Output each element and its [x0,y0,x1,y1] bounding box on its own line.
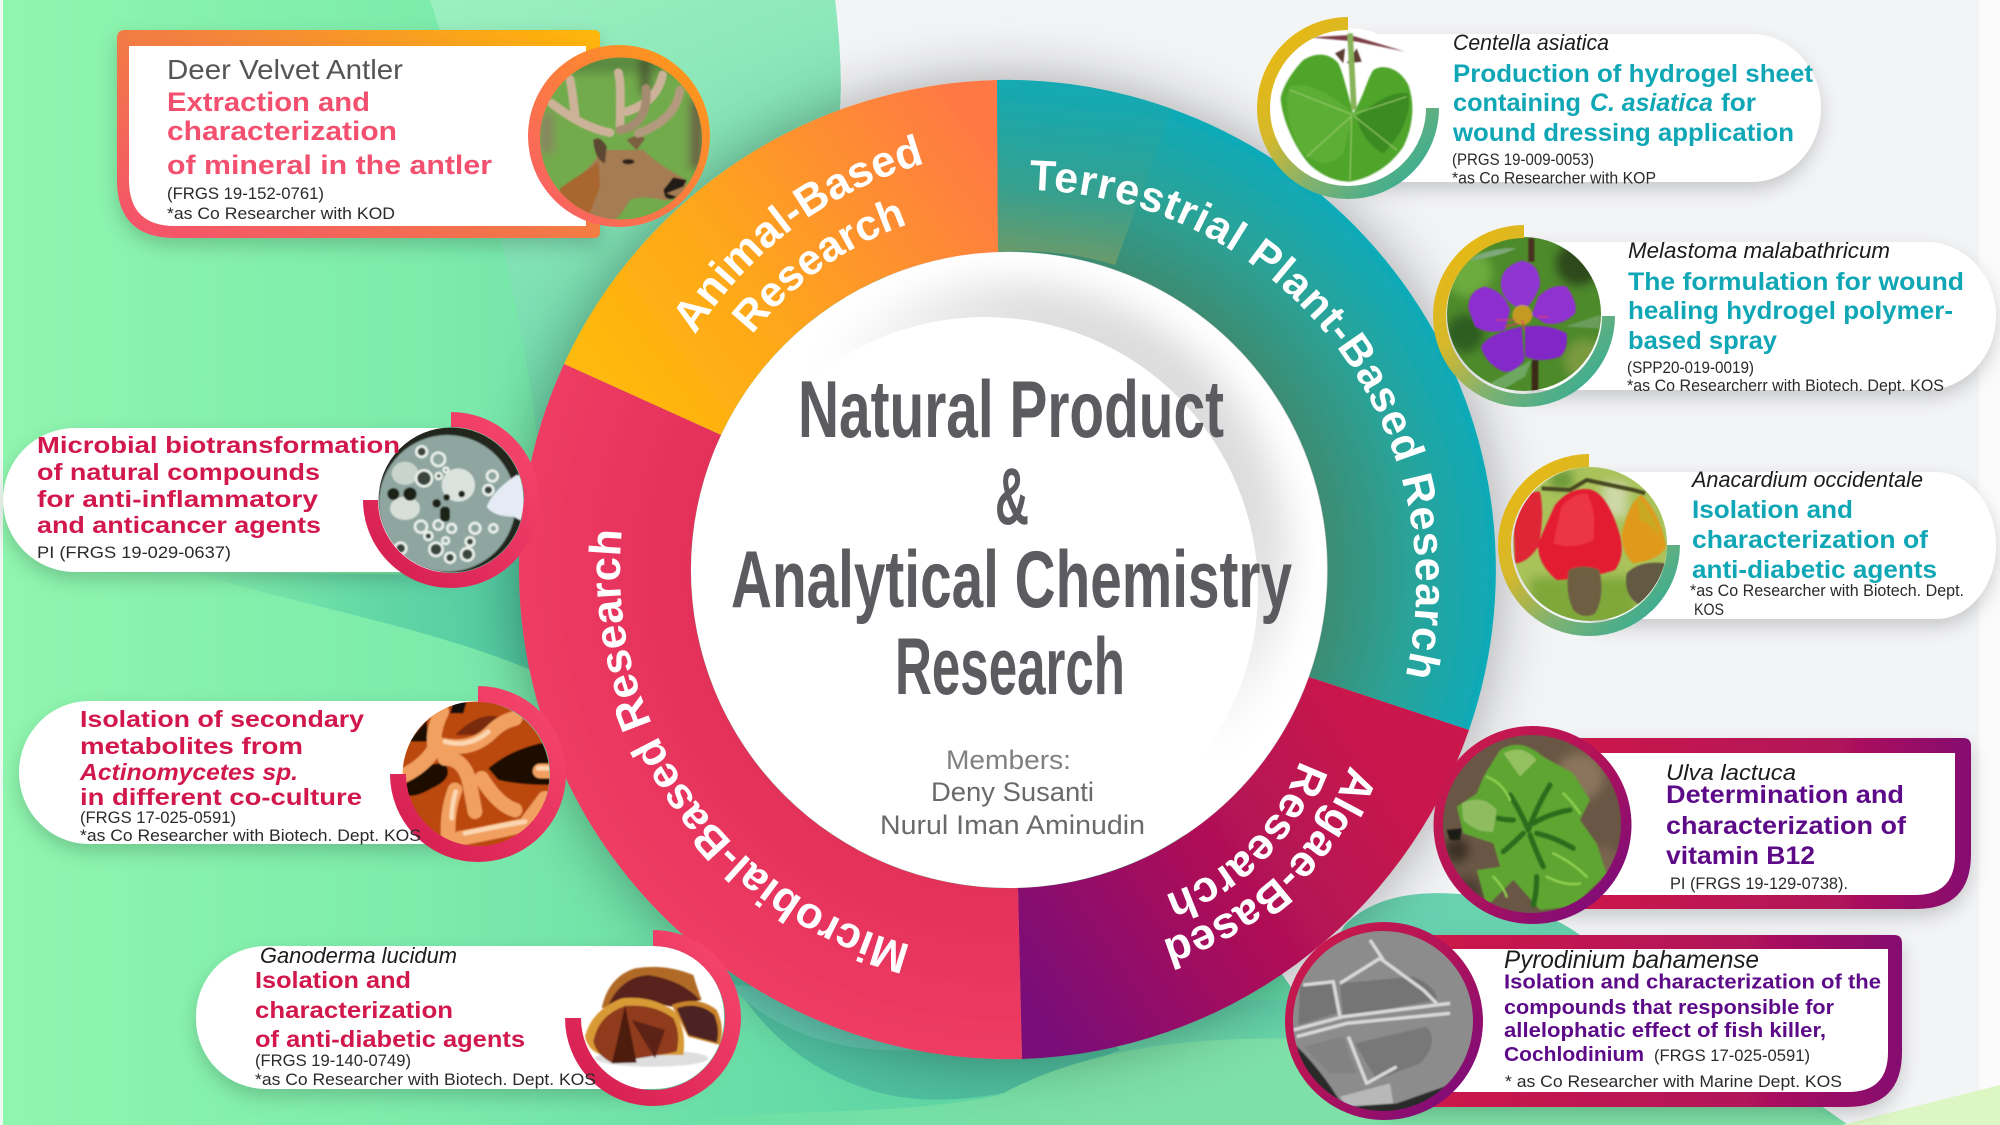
panel text: actinomycetes: (FRGS 17-025-0591) [80,808,236,827]
accent arc [370,420,532,580]
accent arc [1504,460,1674,630]
panel text: anacardium occidentale: Isolation and [1692,496,1853,524]
panel text: anacardium occidentale: Anacardium occidentale [1690,467,1923,492]
panel text: ganoderma lucidum: Isolation and [255,967,411,993]
panel text: centella asiatica [1452,30,1814,188]
panel: ganoderma lucidum [196,938,733,1098]
members: Deny Susanti [931,777,1094,807]
accent arc [573,938,733,1098]
segment: animal-based [564,80,998,435]
panel text: actinomycetes: Isolation of secondary [80,706,364,732]
panel text: centella asiatica: containing [1453,89,1581,117]
panel text: ulva lactuca: PI (FRGS 19-129-0738). [1670,874,1848,893]
panel text: microbial biotransformation: and anticancer agents [37,512,321,538]
panel text: pyrodinium bahamense: Isolation and characterization of the [1504,970,1881,994]
label: animal-based research: Research [731,201,906,333]
panel text: microbial biotransformation: for anti-inflammatory [37,486,318,512]
title: Natural Product [798,365,1224,455]
panel text: microbial biotransformation: Microbial biotransformation [37,432,400,458]
panel text: actinomycetes [79,706,421,845]
photo: centella leaf [1281,33,1412,182]
panel text: ganoderma lucidum: characterization [255,997,453,1023]
panel text: microbial biotransformation: PI (FRGS 19-029-0637) [37,543,231,562]
photo: ganoderma mushrooms [585,967,722,1067]
panel text: ganoderma lucidum: of anti-diabetic agents [255,1026,525,1052]
panel text: actinomycetes: metabolites from [80,733,303,759]
panel text: pyrodinium bahamense: * as Co Researcher with Marine Dept. KOS [1505,1072,1842,1091]
photo: petri dish [378,428,524,572]
panel text: melastoma malabathricum: healing hydrogel polymer- [1628,297,1953,325]
photo: actinomycetes bacteria [402,702,550,846]
photo: cashew fruit [1513,467,1667,621]
photo: purple flower [1447,237,1601,391]
title: & [995,452,1029,542]
panel text: microbial biotransformation: of natural compounds [37,459,320,485]
accent arc [398,694,558,854]
panel text: ulva lactuca: Determination and [1666,781,1904,809]
ring: research segments [486,44,1532,1094]
segment: terrestrial plant-based [997,80,1496,730]
panel text: pyrodinium bahamense: (FRGS 17-025-0591) [1654,1046,1810,1065]
photo: electron micrograph [1285,922,1483,1120]
panel text: deer velvet antler: characterization [167,116,397,146]
panel text: ulva lactuca [1666,760,1907,893]
members: Members: [946,745,1071,775]
panel text: anacardium occidentale: anti-diabetic agents [1692,556,1937,584]
panel text: deer velvet antler: Deer Velvet Antler [167,54,403,85]
panel text: ulva lactuca: characterization of [1666,812,1907,840]
panel text: anacardium occidentale: characterization of [1692,526,1929,554]
panel text: centella asiatica: (PRGS 19-009-0053) [1452,150,1594,169]
panel text: actinomycetes: Actinomycetes sp. [79,759,298,785]
panel text: pyrodinium bahamense: compounds that responsible for [1504,996,1834,1019]
panel text: deer velvet antler [167,54,493,223]
panel text: ganoderma lucidum [255,943,596,1089]
panel text: melastoma malabathricum: Melastoma malabathricum [1628,238,1890,263]
label: animal-based research: Animal-Based [676,134,922,334]
panel: melastoma malabathricum [1425,220,1996,420]
panel text: ulva lactuca: Ulva lactuca [1666,760,1796,785]
panel text: actinomycetes: *as Co Researcher with Biotech. Dept. KOS [80,826,421,845]
panel: deer velvet antler [117,30,720,240]
title [731,365,1292,712]
accent arc [1264,24,1432,193]
panel text: anacardium occidentale: *as Co Researcher with Biotech. Dept. [1690,581,1964,600]
title: Research [895,622,1125,712]
panel text: ulva lactuca: vitamin B12 [1666,842,1815,870]
panel text: centella asiatica: wound dressing application [1452,119,1794,147]
panel text: ganoderma lucidum: *as Co Researcher with Biotech. Dept. KOS [255,1070,596,1089]
panel: ulva lactuca [1430,726,1971,933]
label: terrestrial plant-based research: Terrestrial Plant-Based Research [1030,160,1441,677]
panel: centella asiatica [1264,24,1821,193]
panel: microbial biotransformation [0,412,531,588]
members [880,745,1145,840]
panel text: anacardium occidentale [1690,467,1964,619]
panel text: melastoma malabathricum: The formulation for wound [1628,268,1964,296]
panel: pyrodinium bahamense [1285,922,1902,1120]
panel text: centella asiatica: Centella asiatica [1453,30,1609,55]
panel text: deer velvet antler: (FRGS 19-152-0761) [167,184,324,203]
panel text: ganoderma lucidum: Ganoderma lucidum [260,943,457,968]
panel text: centella asiatica: Production of hydrogel sheet [1453,60,1814,88]
panel text: melastoma malabathricum: *as Co Researcherr with Biotech. Dept. KOS [1627,376,1944,395]
panel text: microbial biotransformation [37,432,400,562]
panel text: centella asiatica: *as Co Researcher with KOP [1452,168,1656,188]
panel text: actinomycetes: in different co-culture [80,784,362,810]
panel text: pyrodinium bahamense: allelophatic effect of fish killer, [1504,1019,1826,1042]
segment overlay: terrestrial left band [997,80,1172,265]
panel text: ganoderma lucidum: (FRGS 19-140-0749) [255,1051,411,1070]
accent arc [1440,232,1608,400]
members: Nurul Iman Aminudin [880,810,1145,840]
title: Analytical Chemistry [731,535,1292,625]
photo: ulva seaweed [1430,726,1637,933]
panel: anacardium occidentale [1490,450,1996,650]
segment: microbial-based [519,364,1022,1059]
panel text: centella asiatica: for [1721,89,1756,117]
panel text: melastoma malabathricum: (SPP20-019-0019) [1627,358,1754,377]
panel text: pyrodinium bahamense [1504,946,1881,1091]
segment: algae-based [1018,677,1469,1059]
centre disc [691,252,1327,888]
panel text: deer velvet antler: of mineral in the antler [167,150,493,180]
panel text: deer velvet antler: *as Co Researcher with KOD [167,204,395,223]
panel text: centella asiatica: C. asiatica [1590,89,1713,117]
label: microbial-based research: Microbial-Based Research [588,532,908,974]
panel text: pyrodinium bahamense: Cochlodinium [1504,1043,1644,1066]
panel text: pyrodinium bahamense: Pyrodinium bahamense [1504,946,1759,974]
panel text: melastoma malabathricum: based spray [1628,327,1777,355]
photo: deer [528,45,710,227]
panel text: anacardium occidentale: KOS [1694,600,1724,619]
panel text: deer velvet antler: Extraction and [167,87,370,117]
panel text: melastoma malabathricum [1627,238,1964,395]
panel: actinomycetes [12,686,566,862]
label: algae-based research: Algae-Based [1164,766,1374,970]
label: algae-based research: Research [1167,762,1328,918]
